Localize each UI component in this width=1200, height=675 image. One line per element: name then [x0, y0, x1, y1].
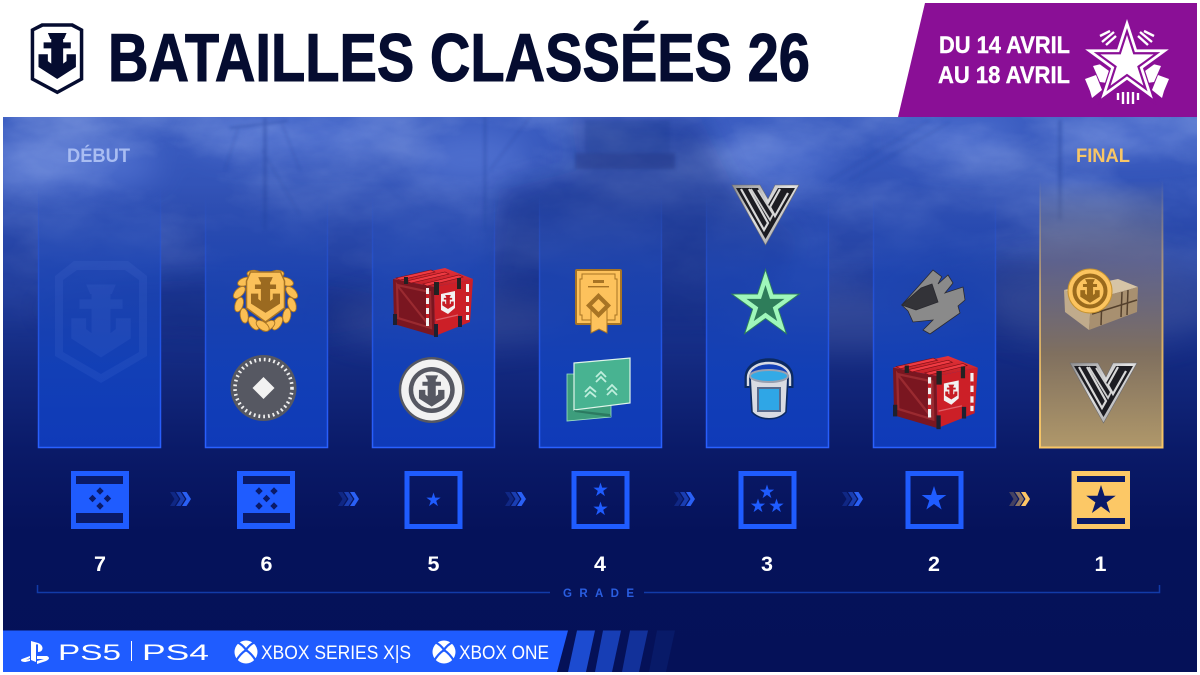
date text: AU 18 AVRIL [938, 62, 1070, 89]
icon: red crate [393, 268, 473, 337]
grade numbers: 5 [428, 552, 440, 576]
rank 5 icon [407, 474, 460, 526]
rank 1 icon [1072, 471, 1130, 529]
date text: DU 14 AVRIL [939, 32, 1070, 59]
label: grade: GRADE [563, 588, 634, 600]
date banner [898, 3, 1197, 117]
label: PS5 and PS4 [58, 640, 209, 665]
icon: red crate [893, 356, 978, 429]
rank 6 icon [237, 471, 295, 529]
panel: rank 6 rewards [205, 195, 328, 448]
icon: silver V emblem [1070, 363, 1137, 423]
icon: faded shield watermark [55, 261, 147, 383]
panel: rank 7 rewards [38, 185, 161, 448]
icon: wooden crate and coin [1064, 269, 1138, 330]
panel: final rewards [1040, 180, 1163, 448]
grade numbers: 4 [594, 552, 606, 576]
icon: green star [730, 268, 801, 335]
header: logo shield [31, 23, 83, 94]
grade numbers: 2 [928, 552, 940, 576]
panel: rank 4 rewards [539, 195, 662, 448]
label: xbox series: XBOX SERIES X|S [261, 642, 411, 664]
panel: rank 2 rewards [873, 195, 996, 448]
arrow 4 to 3 [674, 492, 695, 506]
grade numbers [94, 552, 1107, 576]
icon: anchor token [399, 357, 465, 423]
rank 2 icon [908, 474, 961, 526]
label: début: DÉBUT [67, 145, 130, 167]
grade numbers: 1 [1095, 552, 1107, 576]
arrow 6 to 5 [338, 492, 359, 506]
arrow 3 to 2 [842, 492, 863, 506]
label: xbox one: XBOX ONE [459, 642, 549, 664]
icon: ranked star emblem [1079, 15, 1175, 105]
decorative stripes [568, 630, 675, 672]
icon: paint bucket [747, 361, 791, 419]
arrow 7 to 6 [170, 492, 191, 506]
icon: gold certificate [576, 270, 621, 333]
title: BATAILLES CLASSÉES 26 [108, 20, 810, 96]
arrow 5 to 4 [505, 492, 526, 506]
icon: grey diamond medal [230, 355, 296, 421]
icon: silver V emblem [732, 185, 799, 245]
label: PS5 and PS4: PS5 [58, 640, 121, 665]
label: final: FINAL [1076, 146, 1130, 167]
icon: playstation logo [21, 641, 49, 664]
panel: rank 3 rewards [706, 185, 829, 448]
grade numbers: 6 [261, 552, 273, 576]
rank 3 icon [741, 474, 794, 526]
icon: gold laurel emblem [231, 270, 300, 333]
label: PS5 and PS4: PS4 [142, 640, 209, 665]
grade scale [38, 585, 1160, 600]
grade numbers: 3 [761, 552, 773, 576]
rank 7 icon [71, 471, 129, 529]
rank 4 icon [574, 474, 627, 526]
grade numbers: 7 [94, 552, 106, 576]
milestone labels [67, 145, 1130, 167]
platforms bar [3, 630, 675, 672]
icon: green flags [567, 358, 630, 421]
panel: rank 5 rewards [372, 195, 495, 448]
icon: grey ship part [902, 270, 965, 334]
date text [938, 32, 1070, 89]
icon: xbox logo series [234, 640, 258, 664]
arrow 2 to 1 [1009, 492, 1030, 506]
icon: xbox logo one [432, 640, 456, 664]
